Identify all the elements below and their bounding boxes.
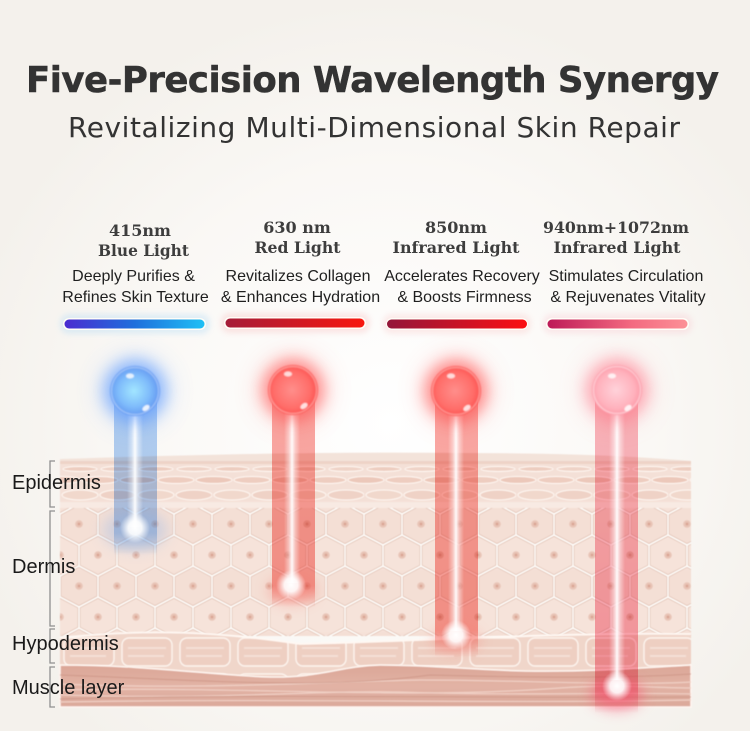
label: hypodermis: Hypodermis <box>12 633 119 655</box>
heading: 940nm+1072nm: 940nm+1072nm <box>543 218 689 237</box>
label: muscle layer: Muscle layer <box>12 677 125 699</box>
title: Five-Precision Wavelength Synergy <box>26 60 719 101</box>
heading: infrared light: Infrared Light <box>392 238 520 257</box>
epidermis layer <box>60 453 691 509</box>
spectrum bar: pink <box>543 314 692 334</box>
label: dermis: Dermis <box>12 556 75 578</box>
column: 630nm red light <box>221 218 380 333</box>
description: deeply purifies: Deeply Purifies & <box>72 268 195 285</box>
dermis layer <box>60 508 691 636</box>
description: revitalizes collagen: Revitalizes Collagen <box>226 268 370 285</box>
hypodermis layer <box>60 632 691 680</box>
column: 940nm+1072nm infrared light <box>543 218 706 334</box>
layer bracket: epidermis <box>50 461 55 507</box>
description: boosts firmness: & Boosts Firmness <box>397 289 532 306</box>
column: 850nm infrared light <box>383 218 540 334</box>
skin cross-section <box>60 453 691 707</box>
heading: blue light: Blue Light <box>98 241 190 260</box>
heading: 630 nm: 630 nm <box>263 218 331 237</box>
spectrum bar: red <box>221 313 370 333</box>
description: accelerates recovery: Accelerates Recovery <box>384 268 540 285</box>
heading: infrared light: Infrared Light <box>554 238 681 257</box>
column: 415nm blue light <box>60 221 210 334</box>
description: stimulates circulation: Stimulates Circulation <box>549 268 703 285</box>
muscle layer <box>60 665 691 707</box>
heading: 415nm: 415nm <box>109 221 171 240</box>
heading: red light: Red Light <box>254 238 341 257</box>
layer bracket: dermis <box>50 511 55 626</box>
light beam: red 630 nm <box>259 356 327 607</box>
description: rejuvenates vitality: & Rejuvenates Vitality <box>550 289 706 306</box>
layer bracket: hypodermis <box>50 629 55 663</box>
heading: 850nm: 850nm <box>425 218 487 237</box>
layer bracket: muscle <box>50 667 55 707</box>
light beam: red 850nm <box>422 357 490 657</box>
light beam: pink 940nm+1072nm <box>583 356 651 713</box>
description: refines skin texture: Refines Skin Texture <box>62 289 209 306</box>
light beam: blue <box>101 357 169 555</box>
spectrum bar: blue <box>60 314 210 334</box>
spectrum bar: deep red <box>383 314 531 334</box>
label: epidermis: Epidermis <box>12 472 101 494</box>
subtitle: Revitalizing Multi-Dimensional Skin Repair <box>68 111 680 144</box>
description: enhances hydration: & Enhances Hydration <box>221 289 380 306</box>
